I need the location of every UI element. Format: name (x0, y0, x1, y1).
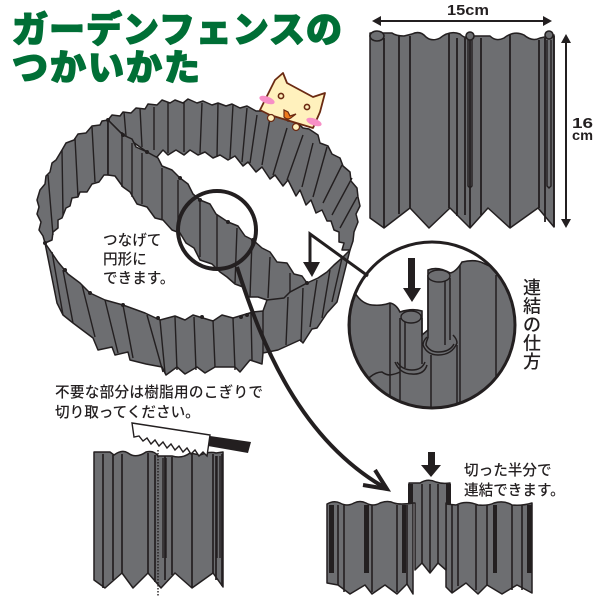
panel: cutting instruction (55, 384, 263, 597)
fence ring (37, 99, 360, 375)
panel: joining cut halves (327, 452, 565, 594)
detail label: 方 (523, 352, 541, 372)
ring caption: できます。 (103, 270, 175, 287)
ring caption: つなげて (103, 232, 161, 249)
cat paws (268, 114, 300, 130)
title: つかいかた (12, 47, 200, 88)
connector beads (45, 120, 307, 318)
ring caption (103, 232, 175, 287)
height arrow (561, 34, 571, 228)
magnifier circle (178, 191, 256, 269)
detail arrow (403, 258, 421, 302)
joined fence ridges (338, 484, 522, 592)
back band (108, 99, 360, 250)
detail label: 仕 (523, 334, 541, 354)
pointer to detail with arrow (303, 234, 368, 277)
cutting caption: 切り取ってください。 (55, 404, 200, 421)
middle band (108, 120, 307, 300)
width arrow (372, 16, 552, 26)
ring caption: 円形に (103, 251, 147, 268)
icon: saw (132, 423, 251, 456)
title (12, 9, 342, 88)
detail circle border (349, 242, 515, 408)
fence panel (370, 33, 554, 228)
detail label: の (523, 315, 541, 335)
circular detail view (350, 260, 514, 406)
rolled connector ends (370, 31, 553, 41)
left joined fence (327, 502, 413, 594)
left band (37, 120, 108, 243)
detail label: 結 (523, 296, 541, 316)
cut line (157, 450, 159, 597)
centre cut piece (409, 480, 450, 573)
curved arrow from magnifier to connection (237, 267, 387, 489)
joining caption: 連結できます。 (464, 482, 565, 499)
joining caption: 切った半分で (464, 462, 552, 479)
height label (572, 115, 593, 143)
panel: connection detail (340, 242, 541, 420)
panel: fence dimensions (370, 2, 593, 228)
cut fence grooves (163, 456, 220, 558)
cutting caption (55, 384, 263, 421)
fence grooves (468, 40, 551, 188)
cutting caption: 不要な部分は樹脂用のこぎりで (55, 384, 263, 401)
cut fence panel (94, 451, 223, 588)
fence ridges (384, 34, 554, 228)
height label: 16 (572, 115, 593, 132)
right joined fence (446, 502, 532, 594)
width label: 15cm (447, 2, 489, 19)
dark connector strips (329, 484, 532, 573)
front band (45, 243, 350, 375)
join arrow (421, 452, 441, 477)
cut fence ridges (103, 453, 222, 588)
cat mascot (258, 73, 325, 130)
title: ガーデンフェンスの (12, 9, 342, 50)
joining caption (464, 462, 565, 499)
detail label: 連 (523, 278, 541, 298)
height label: cm (572, 127, 593, 143)
